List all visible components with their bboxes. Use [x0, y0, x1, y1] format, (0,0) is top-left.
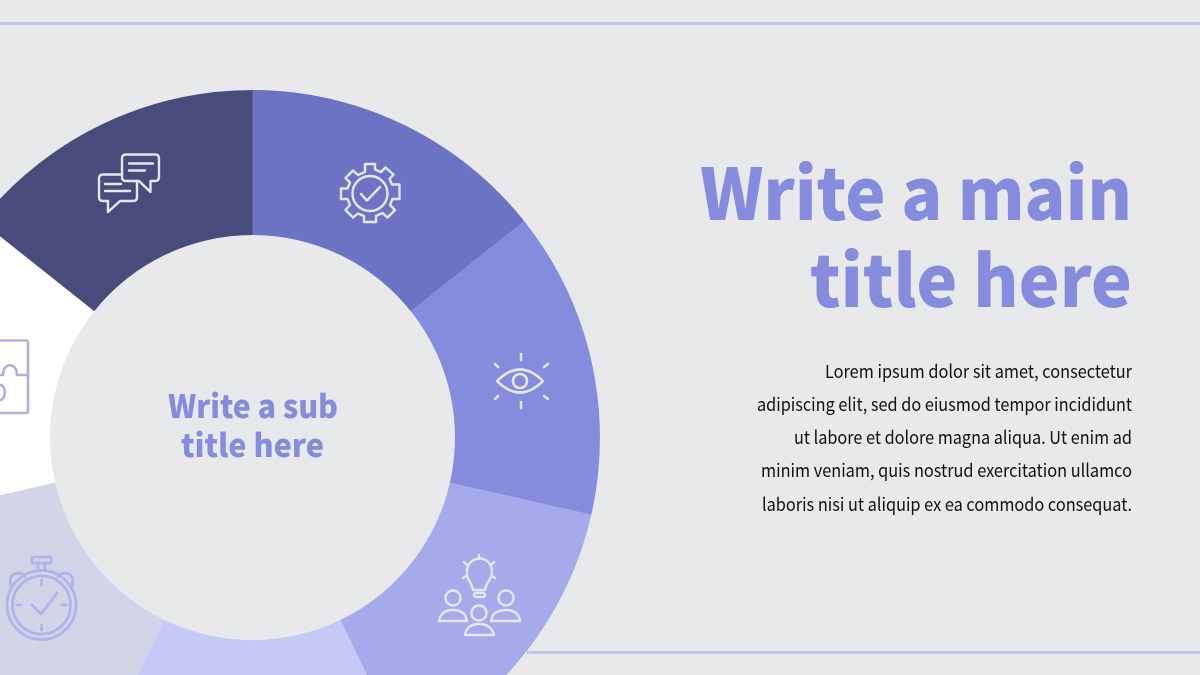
body text: [757, 358, 1133, 517]
subtitle: Write a sub: [168, 382, 338, 428]
segment: indigo: [252, 90, 524, 311]
segment: light periwinkle: [340, 483, 591, 675]
segment: pale grey-lilac: [0, 483, 165, 675]
subtitle: [168, 382, 338, 467]
icon: lightbulb with people: [439, 555, 520, 635]
body text: ut labore et dolore magna aliqua. Ut enim ad: [794, 424, 1132, 450]
icon: eye: [495, 354, 548, 408]
body text: Lorem ipsum dolor sit amet, consectetur: [825, 358, 1133, 384]
segment: white: [0, 236, 94, 495]
segment: pale periwinkle: [138, 620, 367, 675]
main title: title here: [810, 226, 1132, 328]
icon: stopwatch with check: [7, 557, 76, 640]
icon: gear with check: [341, 164, 400, 222]
body text: adipiscing elit, sed do eiusmod tempor incididunt: [757, 391, 1132, 417]
segment: periwinkle: [411, 221, 600, 515]
icon: chat bubbles: [99, 154, 159, 212]
donut chart: [0, 90, 600, 675]
subtitle: title here: [181, 421, 324, 467]
body text: laboris nisi ut aliquip ex ea commodo consequat.: [762, 491, 1132, 517]
main title: [700, 139, 1132, 328]
body text: minim veniam, quis nostrud exercitation ullamco: [761, 457, 1132, 483]
main title: Write a main: [700, 139, 1132, 241]
segment: dark navy: [0, 90, 252, 311]
icon: puzzle piece: [1, 340, 28, 413]
